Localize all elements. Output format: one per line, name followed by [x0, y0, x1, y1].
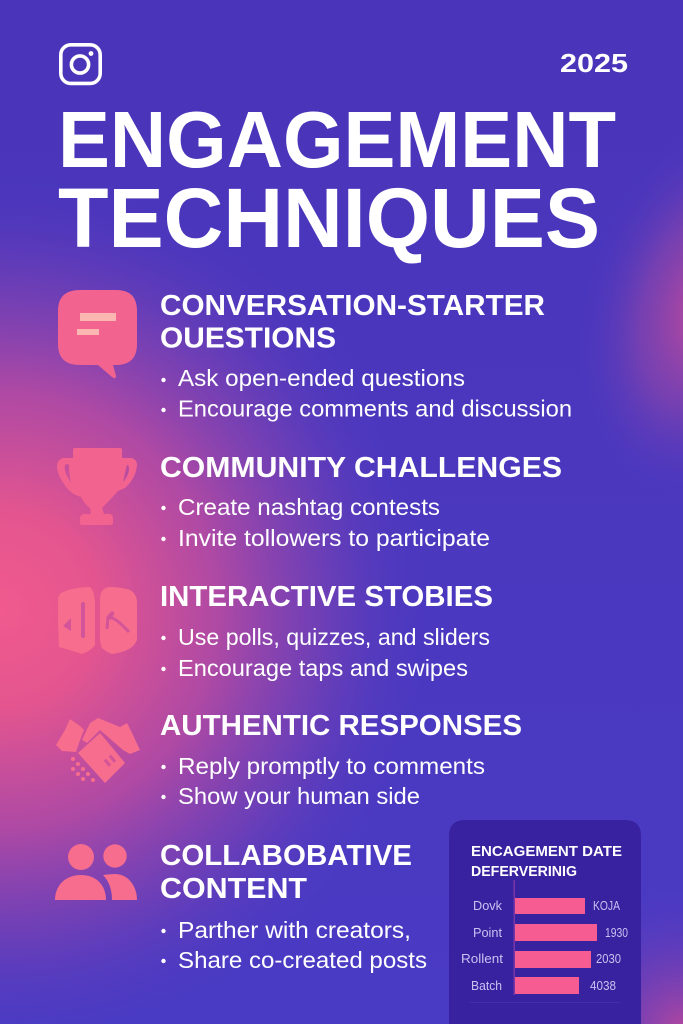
- section: community challenges: [57, 448, 562, 551]
- section: conversation-starter questions: [58, 290, 572, 422]
- bullet list: Ask open-ended questions: [178, 365, 465, 391]
- section: authentic responses: [56, 710, 522, 809]
- bar chart: Rollent: [461, 952, 504, 966]
- title: TECHNIQUES: [58, 171, 600, 265]
- bullet list: [161, 624, 490, 681]
- year: 2025: [560, 48, 628, 78]
- chart title: [471, 844, 622, 880]
- bullet list: Parther with creators,: [178, 917, 411, 943]
- chart title: DEFERVERINIG: [471, 864, 577, 880]
- heading: COMMUNITY CHALLENGES: [160, 452, 562, 484]
- chart title: ENCAGEMENT DATE: [471, 844, 622, 860]
- heading: CONTENT: [160, 873, 308, 905]
- bar chart: 1930: [605, 926, 628, 940]
- heading: [160, 840, 412, 905]
- bar chart: Point: [473, 926, 503, 940]
- bar chart: 4038: [590, 979, 616, 993]
- bullet list: Encourage taps and swipes: [178, 655, 468, 681]
- heading: CONVERSATION-STARTER: [160, 290, 545, 322]
- bullet list: Encourage comments and discussion: [178, 396, 572, 422]
- heading: COLLABOBATIVE: [160, 840, 412, 872]
- icon: trophy: [57, 448, 137, 525]
- bullet list: Show your human side: [178, 783, 420, 809]
- bar chart: [461, 880, 628, 1003]
- bullet list: Create nashtag contests: [178, 494, 440, 520]
- bullet list: [161, 494, 490, 551]
- icon: speech bubble: [58, 290, 137, 378]
- bar chart: 2030: [596, 952, 621, 966]
- bar chart: Batch: [471, 979, 502, 993]
- icon: instagram logo: [61, 45, 100, 83]
- bullet list: Reply promptly to comments: [178, 753, 485, 779]
- heading: INTERACTIVE STOBIES: [160, 581, 493, 613]
- panel: engagement chart: [449, 820, 641, 1024]
- section: collaborative content: [55, 840, 427, 973]
- bullet list: [161, 917, 427, 973]
- title: ENGAGEMENT: [58, 95, 616, 184]
- heading: OUESTIONS: [160, 322, 336, 354]
- title: [58, 95, 616, 265]
- bar chart: Dovk: [473, 899, 503, 913]
- heading: AUTHENTIC RESPONSES: [160, 710, 522, 742]
- icon: people: [55, 844, 137, 900]
- section: interactive stories: [58, 581, 493, 681]
- bullet list: Share co-created posts: [178, 947, 427, 973]
- icon: story panels: [58, 587, 137, 654]
- bullet list: Use polls, quizzes, and sliders: [178, 624, 490, 650]
- bullet list: [161, 365, 572, 422]
- bullet list: [161, 753, 485, 809]
- icon: handshake: [56, 718, 140, 783]
- heading: [160, 290, 545, 354]
- bar chart: KOJA: [593, 899, 621, 913]
- bullet list: Invite tollowers to participate: [178, 525, 490, 551]
